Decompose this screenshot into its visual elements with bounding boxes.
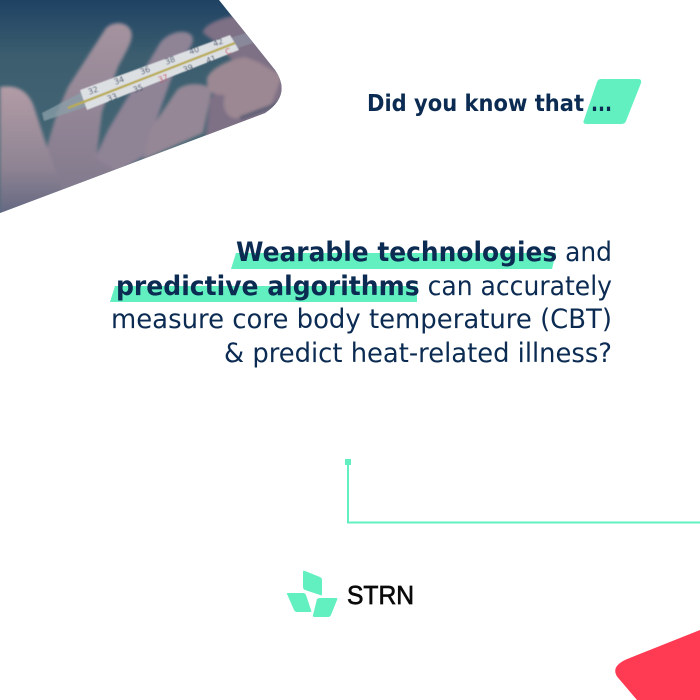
icon: green parallelogram <box>583 79 641 124</box>
photo: hand holding thermometer: 37 <box>157 73 169 85</box>
logo: STRN: STRN <box>347 580 414 610</box>
logo: STRN <box>287 571 414 617</box>
photo: hand holding thermometer: 40 <box>188 45 200 57</box>
heading: did you know that <box>367 79 641 124</box>
photo: hand holding thermometer: 42 <box>212 37 224 49</box>
main statement text: & predict heat-related illness? <box>224 338 612 369</box>
photo: hand holding thermometer: 38 <box>164 55 176 67</box>
photo: hand holding thermometer: 35 <box>132 83 144 95</box>
highlight: predictive algorithms <box>110 286 417 302</box>
photo: hand holding thermometer: 41 <box>205 54 217 66</box>
photo: hand holding thermometer: 39 <box>182 63 194 75</box>
heading: did you know that: Did you know that <box>367 91 584 117</box>
main statement text: Wearable technologies and <box>236 237 612 268</box>
connector line <box>345 459 700 522</box>
photo: hand holding thermometer <box>0 0 300 220</box>
highlight: wearable technologies <box>231 253 556 269</box>
photo: hand holding thermometer: 34 <box>113 75 125 87</box>
photo: hand holding thermometer: 32 <box>87 85 99 97</box>
main statement text: predictive algorithms can accurately <box>116 271 612 302</box>
heading: did you know that: ... <box>591 91 612 117</box>
photo: hand holding thermometer: 36 <box>139 65 151 77</box>
main statement text <box>111 237 612 369</box>
photo: hand holding thermometer: 33 <box>106 92 118 104</box>
corner shape: red <box>615 630 700 700</box>
photo: hand holding thermometer: C <box>224 46 233 57</box>
main statement text: measure core body temperature (CBT) <box>111 304 612 335</box>
